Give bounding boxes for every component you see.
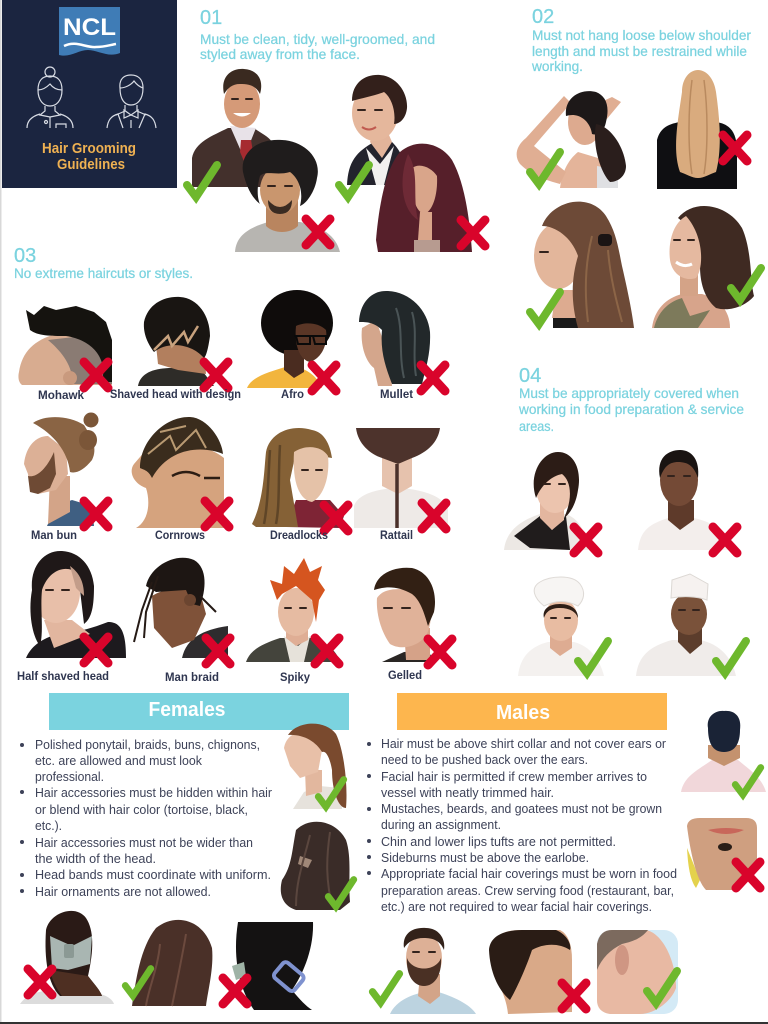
banner: Females xyxy=(49,693,349,730)
heading: section 01: styled away from the face. xyxy=(200,46,360,62)
bullet list: male rules: Hair must be above shirt collar and not cover ears or xyxy=(381,736,667,751)
heading: section 03 xyxy=(14,245,193,281)
icon: x xyxy=(206,638,230,664)
heading: section 03: No extreme haircuts or styles. xyxy=(14,265,193,281)
bullet list: female rules: etc. are allowed and must look xyxy=(35,753,202,768)
bullet list: male rules: Facial hair is permitted if crew member arrives to xyxy=(381,769,647,784)
photo: Afro xyxy=(247,290,336,391)
photo: Shaved head with design xyxy=(138,297,228,388)
photo: server man no hat, x xyxy=(638,450,737,553)
icon: check xyxy=(328,880,354,907)
photo: woman with long red hair, x xyxy=(376,144,485,252)
icon: x xyxy=(324,505,348,531)
label: Cornrows: Cornrows xyxy=(155,528,205,542)
label: Mohawk: Mohawk xyxy=(38,388,84,402)
photo: Man bun xyxy=(24,412,108,527)
icon: x xyxy=(223,978,247,1004)
photo: Man braid xyxy=(134,558,230,664)
bullet list: male rules: during an assignment. xyxy=(381,817,501,832)
photo: Cornrows xyxy=(132,417,229,528)
icon: x xyxy=(428,639,452,665)
icon: x xyxy=(723,135,747,161)
heading: section 02 xyxy=(531,6,751,74)
icon: x xyxy=(736,862,760,888)
bullet list: male rules xyxy=(367,736,677,914)
icon: x xyxy=(84,501,108,527)
title: Hair Grooming Guidelines: Hair Grooming xyxy=(42,141,136,157)
photo: Mullet xyxy=(359,291,445,391)
bullet list: female rules: etc.). xyxy=(35,818,62,833)
icon: x xyxy=(84,637,108,663)
icon: x xyxy=(84,362,108,388)
heading: section 02: Must not hang loose below shoulder xyxy=(532,27,751,43)
icon: check xyxy=(530,152,560,184)
icon: check xyxy=(318,780,344,807)
bullet list: male rules: Mustaches, beards, and goatees must not be grown xyxy=(381,801,662,816)
label: Afro: Afro xyxy=(281,387,304,401)
icon: male crew outline xyxy=(107,75,156,128)
photo: server woman no hat, x xyxy=(504,452,598,553)
bullet list: female rules: Hair accessories must be hidden within hair xyxy=(35,785,273,800)
photo: Half shaved head xyxy=(26,551,126,663)
icon: check xyxy=(647,971,677,1003)
panel: Females xyxy=(20,693,354,1010)
heading: section 01: 01 xyxy=(200,7,222,29)
bullet list: female rules: or blend with hair color (tortoise, black, xyxy=(35,802,248,817)
bullet list: female rules: Hair ornaments are not allowed. xyxy=(35,884,211,899)
heading: section 04: areas. xyxy=(519,418,554,434)
photo: chef man with cap, check xyxy=(636,574,746,676)
icon: x xyxy=(315,638,339,664)
label: Man bun: Man bun xyxy=(31,528,77,542)
icon: check xyxy=(339,165,369,197)
photo: man in suit, check xyxy=(187,69,272,197)
label: Shaved head with design: Shaved head with design xyxy=(110,387,241,401)
icon: x xyxy=(205,501,229,527)
panel: NCL header xyxy=(2,0,177,188)
heading: section 02: length and must be restrained while xyxy=(532,43,747,59)
icon: check xyxy=(530,292,560,324)
label: Mullet: Mullet xyxy=(380,387,413,401)
label: Dreadlocks: Dreadlocks xyxy=(270,528,328,542)
logo: NCL xyxy=(59,7,120,56)
icon: x xyxy=(461,220,485,246)
label: Gelled: Gelled xyxy=(388,668,422,682)
bullet list: female rules: Polished ponytail, braids, buns, chignons, xyxy=(35,737,260,752)
title: Hair Grooming Guidelines xyxy=(42,141,136,173)
bullet list: female rules: Head bands must coordinate with uniform. xyxy=(35,867,271,882)
photo: chin tuft, x xyxy=(687,818,760,890)
icon: check xyxy=(716,641,746,673)
banner: Males xyxy=(397,693,667,730)
bullet list: male rules: vessel with neatly trimmed hair. xyxy=(381,785,554,800)
icon: x xyxy=(562,983,586,1009)
photo: woman half ponytail, check xyxy=(530,202,634,328)
label: Man braid: Man braid xyxy=(165,670,219,684)
label: Half shaved head: Half shaved head xyxy=(17,669,109,683)
photo: man with messy hair, x xyxy=(235,140,340,252)
icon: x xyxy=(28,969,52,995)
photo: claw clip, x xyxy=(223,922,313,1010)
bullet list: male rules: etc.) are not required to wear facial hair coverings. xyxy=(381,899,652,914)
icon: x xyxy=(421,365,445,391)
photo: hair over ear, x xyxy=(489,930,586,1014)
icon: x xyxy=(306,219,330,245)
icon: check xyxy=(578,641,608,673)
icon: x xyxy=(422,503,446,529)
icon: check xyxy=(372,974,400,1002)
bullet list: female rules: professional. xyxy=(35,769,104,784)
icon: check xyxy=(731,268,761,300)
heading: section 02: 02 xyxy=(532,6,554,28)
photo: Dreadlocks xyxy=(252,428,348,531)
icon: female crew outline xyxy=(27,67,73,128)
logo: NCL: NCL xyxy=(63,14,116,41)
label: Spiky: Spiky xyxy=(280,670,310,684)
bullet list: male rules: Appropriate facial hair coverings must be worn in food xyxy=(381,866,677,881)
heading: section 04: Must be appropriately covered when xyxy=(519,385,739,401)
banner: Males: Males xyxy=(496,702,550,724)
photo: chef woman with toque, check xyxy=(518,577,608,676)
photo: long blonde hair from behind, x xyxy=(657,70,747,189)
photo: Spiky xyxy=(246,558,340,664)
heading: section 04: 04 xyxy=(519,365,541,387)
label: Rattail: Rattail xyxy=(380,528,413,542)
heading: section 03: 03 xyxy=(14,245,36,267)
title: Hair Grooming Guidelines: Guidelines xyxy=(57,157,125,173)
photo: man back of head, check xyxy=(681,711,766,795)
photo: woman tying hair, check xyxy=(517,91,626,188)
photo: Rattail xyxy=(354,428,448,529)
icon: check xyxy=(125,969,151,996)
photo: Gelled xyxy=(374,568,452,665)
icon: x xyxy=(574,527,598,553)
bullet list: female rules xyxy=(20,737,273,899)
bullet list: male rules: need to be pushed back over the ears. xyxy=(381,752,588,767)
icon: x xyxy=(713,527,737,553)
bullet list: female rules: Hair accessories must not be wider than xyxy=(35,835,253,850)
heading: section 02: working. xyxy=(531,58,583,74)
bullet list: male rules: Chin and lower lips tufts are not permitted. xyxy=(381,834,616,849)
heading: section 04: working in food preparation & service xyxy=(518,401,744,417)
photo: half-up hair, check xyxy=(281,822,354,910)
banner: Females: Females xyxy=(148,699,226,721)
photo: short hair at ear, check xyxy=(597,930,678,1014)
bullet list: male rules: preparation areas. Crew serving food (restaurant, bar, xyxy=(381,883,674,898)
photo: hair bow, x xyxy=(20,911,114,1004)
photo: woman with bun, check xyxy=(339,75,408,197)
photo: smiling woman with shoulder hair, check xyxy=(652,206,761,328)
photo: ponytail profile, check xyxy=(284,724,347,809)
icon: x xyxy=(312,365,336,391)
photo: Mohawk xyxy=(18,306,112,388)
heading: section 01 xyxy=(200,7,435,62)
icon: x xyxy=(204,362,228,388)
photo: bearded man, check xyxy=(372,928,476,1014)
panel: Males xyxy=(367,693,766,1014)
photo: dark hair with part, check xyxy=(125,920,212,1006)
heading: section 04 xyxy=(518,365,744,434)
bullet list: female rules: the width of the head. xyxy=(35,851,156,866)
bullet list: male rules: Sideburns must be above the earlobe. xyxy=(381,850,589,865)
icon: check xyxy=(187,165,217,197)
heading: section 01: Must be clean, tidy, well-groomed, and xyxy=(200,31,435,47)
icon: check xyxy=(735,768,761,795)
